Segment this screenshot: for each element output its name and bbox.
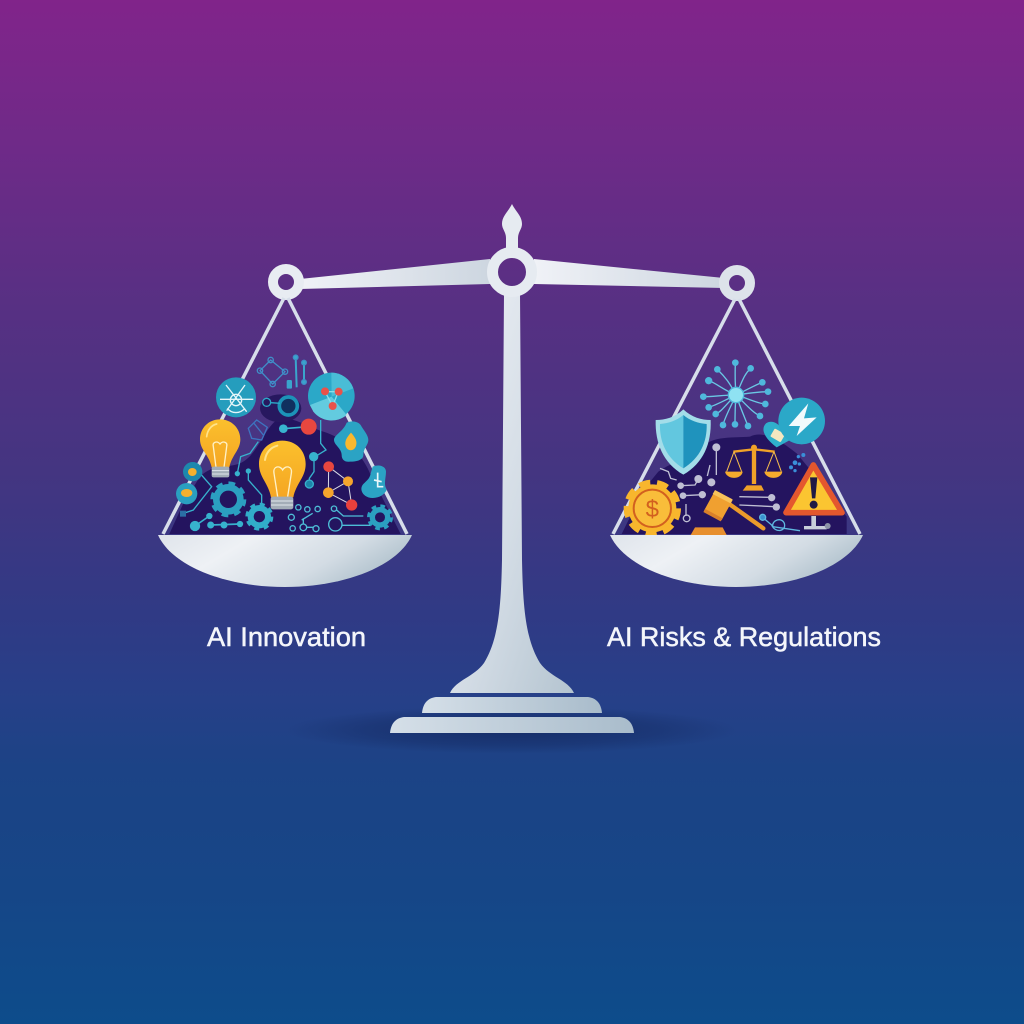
right ring [724, 270, 750, 296]
icon: circuit traces [183, 420, 326, 513]
icon: bottom circuit cluster [288, 505, 320, 532]
icon: large gear [212, 483, 244, 515]
icon: medium gear [247, 504, 272, 529]
left beam arm [300, 259, 490, 289]
base step upper [422, 697, 602, 713]
beam [273, 204, 750, 296]
dollar sign: $ [646, 496, 659, 523]
dark blob [260, 394, 301, 422]
finial [502, 204, 522, 250]
icon: badge with flame [334, 421, 368, 462]
right beam arm [534, 259, 724, 288]
icon: top line symbols [257, 355, 306, 389]
dark mound [169, 418, 401, 534]
icon: teal circle with red nodes [308, 373, 355, 421]
icon: warning sign [786, 465, 842, 529]
label: AI Innovation: AI Innovation [207, 622, 366, 652]
left pan bowl [158, 535, 412, 587]
icon: small blue dots [789, 453, 805, 472]
icon: lightning badge [763, 398, 825, 447]
label: AI Risks & Regulations: AI Risks & Regulations [607, 622, 881, 652]
icon: dollar gear [627, 483, 678, 534]
left ring [273, 269, 299, 295]
icon: large light bulb [259, 441, 306, 509]
icon: neural hub [700, 359, 771, 429]
scale stand [390, 294, 634, 733]
icon: red node with teal link [279, 419, 317, 435]
right pan contents: regulation icons [622, 359, 847, 535]
right pan bowl [610, 535, 863, 587]
icon: grey circuit traces [660, 444, 779, 522]
icon: node network [323, 461, 357, 511]
icon: right gear [369, 506, 391, 529]
dark mound [622, 435, 847, 534]
icon: shield [656, 409, 711, 475]
icon: ring node [263, 397, 297, 415]
icon: small light bulb [200, 419, 240, 477]
left pan strings [163, 298, 407, 534]
icon: teal circle with neural glyph [216, 377, 256, 417]
left pan contents: innovation icons [169, 355, 401, 534]
right pan strings [613, 299, 860, 534]
central post [450, 294, 574, 693]
icon: golden scales [725, 445, 782, 491]
icon: stethoscope trace [760, 514, 800, 531]
icon: outlined circuit [248, 420, 267, 440]
icon: bottom right link [329, 506, 370, 531]
base step lower [390, 717, 634, 733]
ground shadow [287, 706, 737, 754]
icon: teal tool badge [361, 465, 387, 498]
icon: small left badges [176, 462, 202, 504]
icon: bottom left links [180, 511, 242, 530]
icon: gavel [691, 490, 763, 535]
centre hub [492, 252, 532, 292]
